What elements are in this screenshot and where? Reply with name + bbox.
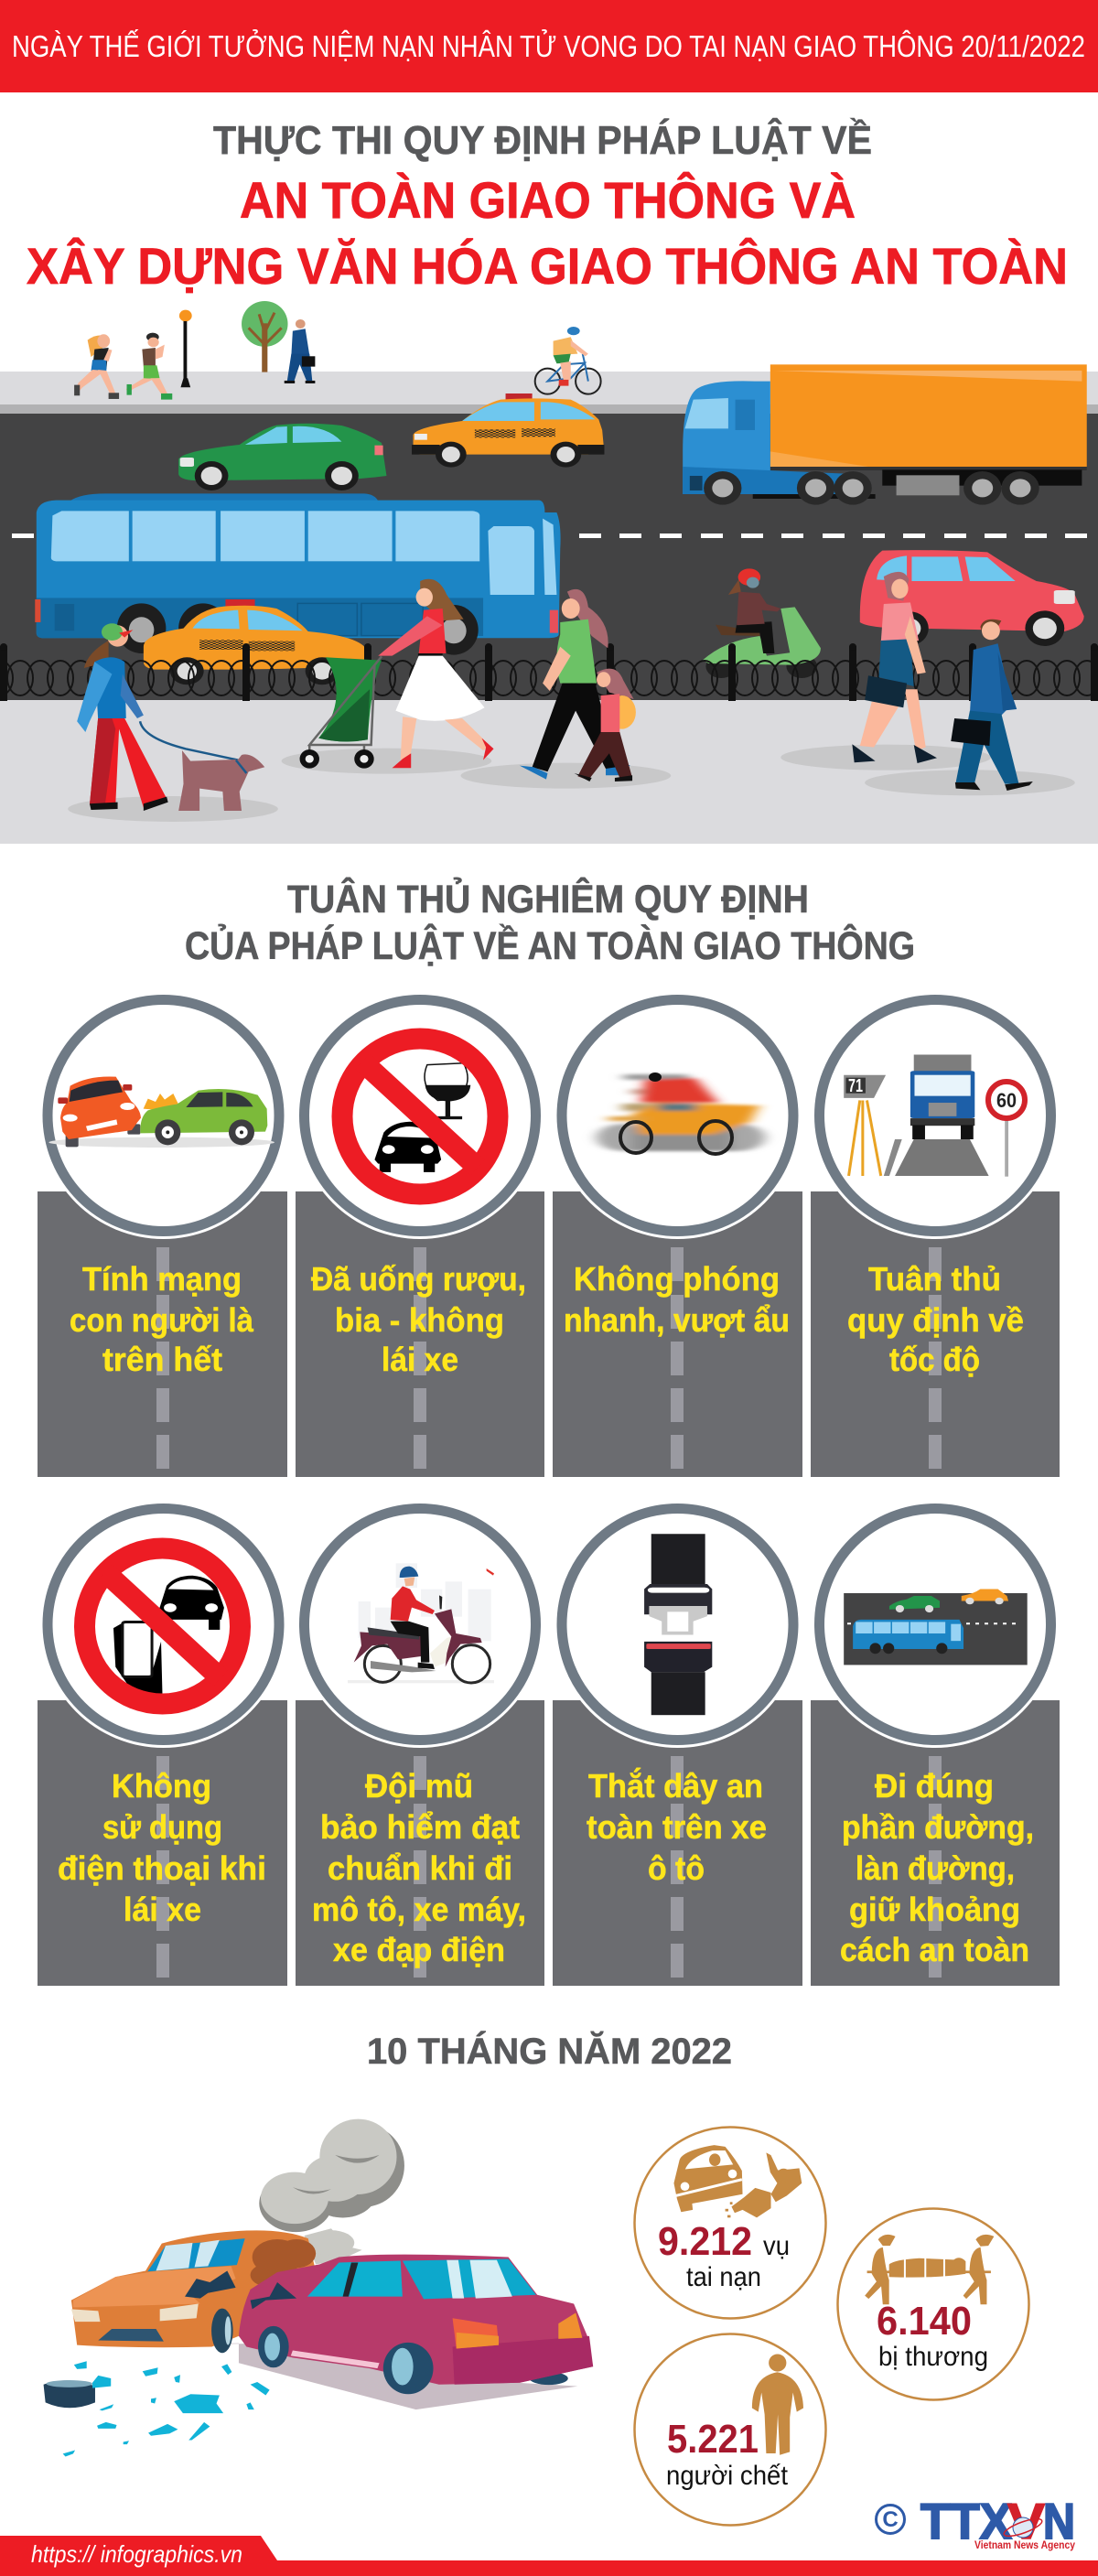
- woman with stroller: [378, 579, 494, 768]
- panel: helmet: xe đạp điện: [333, 1931, 505, 1968]
- title: [27, 117, 1068, 295]
- dog walker: [77, 623, 238, 811]
- railing fence: [0, 643, 1098, 701]
- panel: no phone: sử dụng: [102, 1808, 222, 1846]
- walking man: [285, 319, 315, 383]
- panel: no drink driving: Đã uống rượu,: [311, 1260, 526, 1298]
- icon: speed camera, truck and limit sign: [844, 1054, 1025, 1177]
- icon: seat belt: [644, 1534, 712, 1715]
- stat: deaths: [635, 2333, 825, 2526]
- vehicles group: [35, 364, 1087, 684]
- logo: TTXVN: TTX: [920, 2493, 1012, 2549]
- footer bar: [0, 2536, 1098, 2576]
- panel: seat belt: Thắt dây an: [588, 1766, 763, 1805]
- logo: TTXVN: Vietnam News Agency: [974, 2538, 1075, 2551]
- panel: no phone: [38, 1501, 287, 1986]
- title: THỰC THI QUY ĐỊNH PHÁP LUẬT VỀ: [213, 117, 872, 163]
- shadow: [85, 2344, 577, 2409]
- icon: motorbike rider with helmet: [348, 1563, 494, 1683]
- woman right: [852, 572, 937, 763]
- logo: TTXVN: [877, 2493, 1075, 2551]
- panel: no phone: lái xe: [124, 1891, 201, 1928]
- footer bar: https:// infographics.vn: [31, 2540, 242, 2568]
- panel: life first: [38, 992, 287, 1477]
- panel: seat belt: ô tô: [648, 1849, 705, 1887]
- icon: car collision: [48, 1076, 274, 1148]
- panel: helmet: Đội mũ: [365, 1767, 473, 1805]
- section heading: compliance: [185, 877, 915, 968]
- stat: deaths: người chết: [666, 2461, 789, 2491]
- illustration: car crash: [44, 2119, 593, 2457]
- header banner: [0, 0, 1098, 92]
- runner 1: [74, 334, 119, 399]
- section heading: compliance: CỦA PHÁP LUẬT VỀ AN TOÀN GIAO THÔNG: [185, 923, 915, 968]
- panel: life first: con người là: [70, 1301, 254, 1339]
- panel: speed rules: quy định về: [847, 1301, 1024, 1339]
- panel: seat belt: toàn trên xe: [587, 1808, 767, 1846]
- icon: standing person: [752, 2354, 803, 2455]
- stroller: [300, 656, 382, 769]
- icon: road with vehicles: [844, 1590, 1028, 1665]
- icon: car hitting motorbike: [673, 2145, 802, 2217]
- dog: [178, 750, 264, 811]
- businessman: [951, 620, 1033, 791]
- panel: seat belt: [553, 1501, 802, 1986]
- pink car: [239, 2255, 593, 2394]
- icon: speeding motorbike: [597, 1072, 765, 1154]
- panel: no drink driving: bia - không: [335, 1301, 504, 1339]
- icon: no phone sign: [84, 1548, 240, 1704]
- panel: no phone: Không: [112, 1767, 211, 1805]
- icon: speed camera, truck and limit sign: 71: [848, 1076, 863, 1096]
- icon: stretcher carriers: [865, 2235, 994, 2304]
- stat: accidents: 9.212: [658, 2219, 752, 2264]
- panel: no drink driving: [296, 992, 544, 1477]
- green car: [178, 424, 386, 490]
- lane dashes: [12, 534, 1087, 538]
- panel: no speeding: [553, 992, 802, 1477]
- stat: injured: bị thương: [878, 2342, 988, 2372]
- panel: life first: trên hết: [102, 1341, 222, 1378]
- child: [575, 669, 636, 781]
- taxi far: [412, 393, 604, 468]
- stat: injured: [838, 2209, 1028, 2399]
- stat: accidents: tai nạn: [686, 2262, 761, 2292]
- panel: helmet: [296, 1501, 544, 1986]
- panel: speed rules: tốc độ: [889, 1341, 980, 1378]
- logo: TTXVN: C: [882, 2507, 899, 2532]
- panel: lane discipline: Đi đúng: [875, 1767, 994, 1805]
- panel: no speeding: nhanh, vượt ẩu: [564, 1301, 790, 1339]
- icon: no alcohol sign: [342, 1039, 498, 1194]
- panel: lane discipline: làn đường,: [856, 1849, 1015, 1887]
- stat: accidents: vụ: [763, 2231, 790, 2261]
- icon: speed camera, truck and limit sign: 60: [996, 1089, 1017, 1112]
- street scene: [0, 301, 1098, 844]
- panel: no drink driving: lái xe: [382, 1341, 458, 1378]
- logo: TTXVN: N: [1043, 2493, 1075, 2549]
- tree: [242, 301, 288, 372]
- tyre and glass: [44, 2361, 270, 2457]
- logo: TTXVN: V: [1007, 2493, 1045, 2549]
- bus: [35, 493, 561, 655]
- stat: injured: 6.140: [877, 2299, 972, 2344]
- panel: lane discipline: giữ khoảng: [849, 1891, 1020, 1928]
- panel: no phone: điện thoại khi: [58, 1849, 266, 1887]
- runner 2: [126, 333, 172, 400]
- panel: speed rules: [811, 992, 1060, 1477]
- pedestrians near: [68, 572, 1075, 822]
- stat: deaths: 5.221: [667, 2417, 759, 2462]
- red car: [860, 550, 1084, 646]
- panel: lane discipline: phần đường,: [842, 1808, 1034, 1846]
- panel: helmet: mô tô, xe máy,: [312, 1891, 526, 1928]
- lamp post: [179, 310, 192, 387]
- panel: helmet: chuẩn khi đi: [328, 1849, 512, 1887]
- orange car: [71, 2230, 316, 2353]
- smoke: [259, 2119, 404, 2264]
- scooter: [703, 568, 821, 678]
- truck: [683, 364, 1087, 505]
- cyclist: [535, 327, 601, 394]
- section heading: compliance: TUÂN THỦ NGHIÊM QUY ĐỊNH: [287, 877, 809, 922]
- panel: helmet: bảo hiểm đạt: [320, 1808, 520, 1846]
- panel: lane discipline: [811, 1501, 1060, 1986]
- panel: lane discipline: cách an toàn: [840, 1931, 1029, 1968]
- pedestrians and objects on far sidewalk: [74, 301, 601, 400]
- mother: [520, 589, 630, 780]
- panel: no speeding: Không phóng: [574, 1260, 780, 1298]
- section heading: 10 months: 10 THÁNG NĂM 2022: [367, 2031, 732, 2072]
- panel: life first: Tính mạng: [82, 1260, 242, 1298]
- title: AN TOÀN GIAO THÔNG VÀ: [240, 171, 856, 229]
- taxi near: [144, 599, 365, 684]
- panel: speed rules: Tuân thủ: [868, 1260, 1001, 1298]
- stat: accidents: [635, 2127, 825, 2319]
